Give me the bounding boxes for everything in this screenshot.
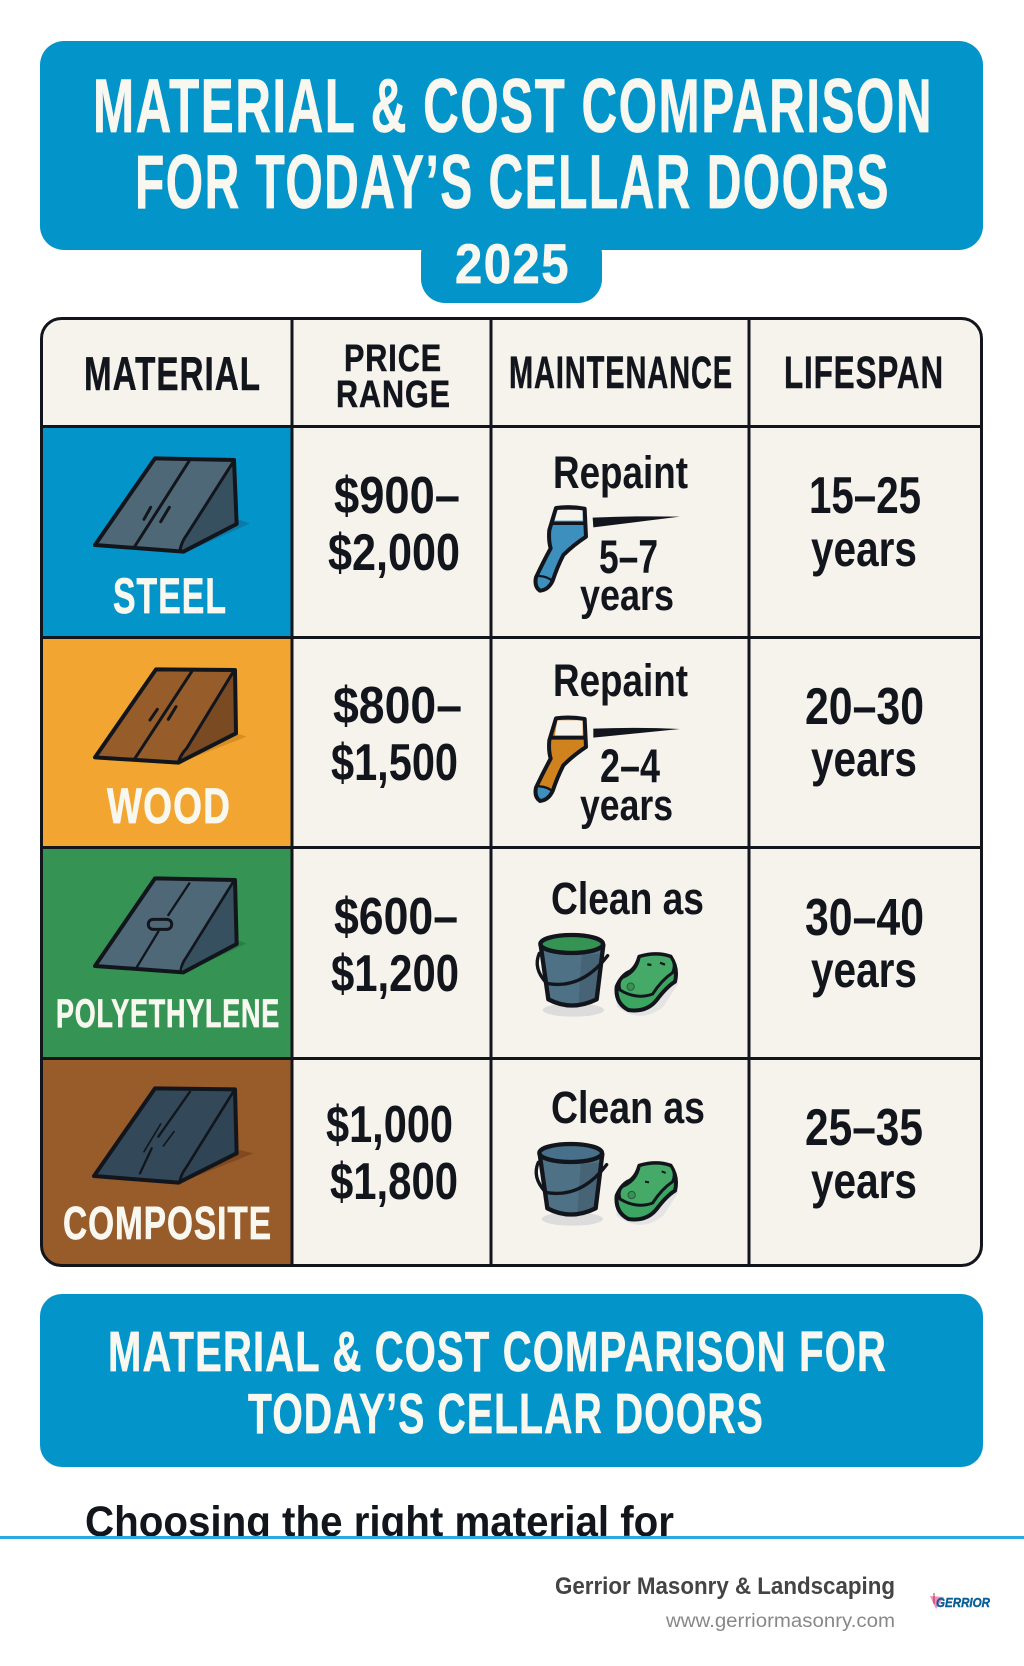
- maintenance: wood: [535, 655, 688, 830]
- price: steel: [328, 467, 460, 582]
- price: polyethylene: $600–: [334, 888, 458, 946]
- lifespan: steel: 15–25: [809, 467, 921, 525]
- price: steel: $2,000: [328, 524, 460, 582]
- price: wood: [331, 677, 462, 792]
- lifespan: polyethylene: [805, 889, 924, 998]
- maintenance: polyethylene: Clean as: [551, 873, 704, 924]
- table header row: LIFESPAN: [784, 347, 944, 398]
- footer: [0, 1536, 1024, 1666]
- table header row: RANGE: [336, 374, 451, 416]
- table header row: MATERIAL: [84, 347, 261, 400]
- comparison table: [41, 318, 982, 1267]
- maintenance: wood: Repaint: [553, 655, 688, 706]
- secondary banner text: [108, 1320, 887, 1446]
- maintenance: steel: [535, 447, 688, 620]
- lifespan: wood: years: [811, 731, 917, 787]
- maintenance: steel: years: [580, 571, 674, 620]
- lifespan: wood: [805, 678, 924, 787]
- price: polyethylene: [331, 888, 459, 1003]
- icon: paint brush: [535, 717, 680, 801]
- lifespan: composite: years: [811, 1153, 917, 1209]
- table header row: [84, 338, 944, 416]
- lifespan: steel: [809, 467, 921, 577]
- label: polyethylene: POLYETHYLENE: [56, 992, 280, 1036]
- maintenance: steel: 5–7: [599, 530, 658, 583]
- price: polyethylene: $1,200: [331, 945, 459, 1003]
- lifespan: composite: [805, 1099, 923, 1209]
- website: www.gerriormasonry.com: [665, 1611, 895, 1632]
- price: wood: $1,500: [331, 734, 458, 792]
- icon: paint brush: [535, 507, 680, 591]
- lifespan: polyethylene: 30–40: [805, 889, 924, 947]
- row: composite: [63, 1082, 923, 1249]
- maintenance: wood: years: [580, 781, 673, 830]
- table header row: PRICE: [344, 338, 442, 380]
- price: steel: $900–: [334, 467, 460, 525]
- icon: logo: GERRIOR: [936, 1595, 991, 1610]
- icon: bucket: [536, 1144, 607, 1226]
- maintenance: polyethylene: [537, 873, 704, 1017]
- label: composite: COMPOSITE: [63, 1197, 272, 1249]
- lifespan: composite: 25–35: [805, 1099, 923, 1157]
- lifespan: steel: years: [811, 521, 917, 577]
- icon: steel cellar door: [95, 458, 250, 553]
- price: composite: [326, 1096, 458, 1211]
- icon: wood cellar door: [95, 669, 247, 763]
- title text: 2025: [455, 232, 570, 295]
- title banner: [40, 41, 983, 303]
- icon: composite cellar door: [94, 1088, 253, 1183]
- secondary banner text: TODAY’S CELLAR DOORS: [248, 1382, 764, 1446]
- company name: Gerrior Masonry & Landscaping: [555, 1573, 895, 1600]
- lifespan: polyethylene: years: [811, 942, 917, 998]
- icon: sponge: [616, 954, 678, 1016]
- maintenance: steel: Repaint: [553, 447, 688, 498]
- intro text clipped by footer: Choosing the right material for: [85, 1498, 674, 1546]
- row: wood: [95, 655, 924, 834]
- title text: [93, 64, 933, 295]
- icon: polyethylene cellar door: [95, 878, 247, 973]
- row: polyethylene: [56, 873, 924, 1036]
- table header row: MAINTENANCE: [509, 347, 733, 398]
- label: wood: WOOD: [107, 778, 231, 834]
- maintenance: composite: Clean as: [551, 1082, 705, 1133]
- icon: bucket: [537, 935, 608, 1017]
- row: steel: [95, 447, 921, 624]
- maintenance: composite: [536, 1082, 705, 1226]
- price: wood: $800–: [333, 677, 462, 735]
- icon: sponge: [616, 1163, 678, 1225]
- price: composite: $1,800: [330, 1153, 458, 1211]
- lifespan: wood: 20–30: [805, 678, 924, 736]
- secondary banner: [40, 1294, 983, 1467]
- price: composite: $1,000: [326, 1096, 453, 1154]
- label: steel: STEEL: [113, 568, 227, 624]
- maintenance: wood: 2–4: [600, 739, 660, 792]
